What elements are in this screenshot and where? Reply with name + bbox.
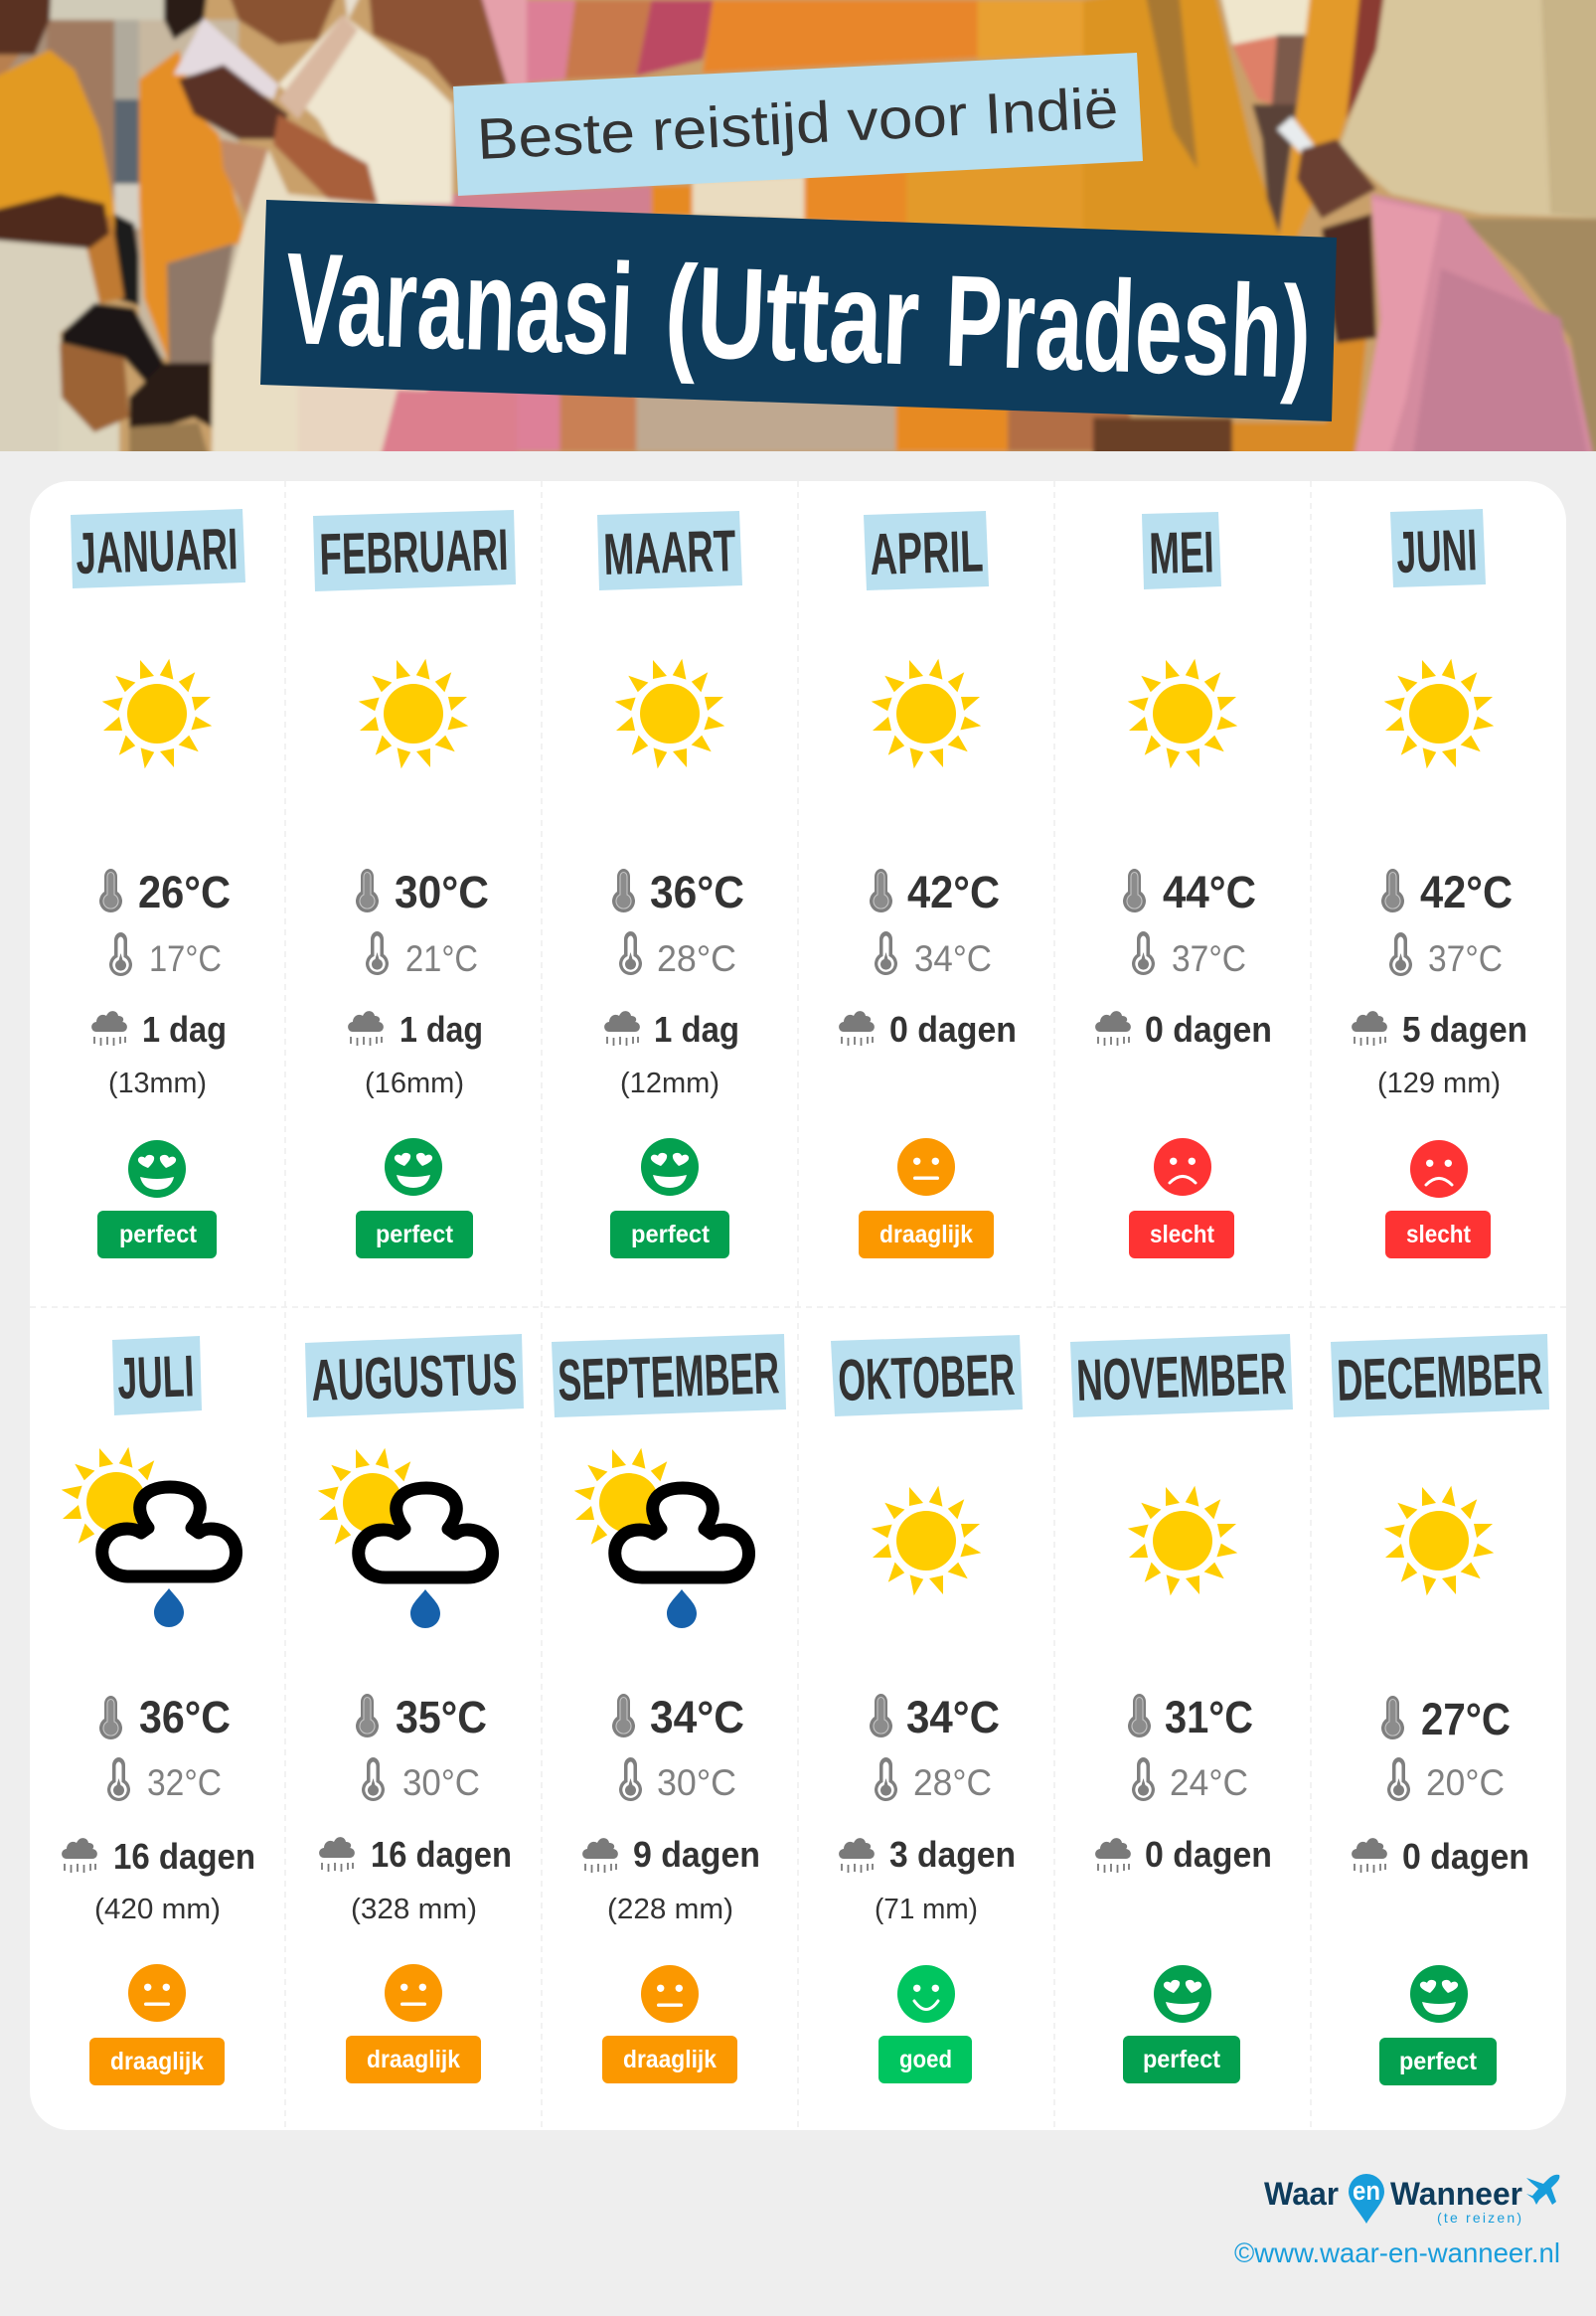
rating badge xyxy=(859,1211,994,1258)
month label: SEPTEMBER xyxy=(557,1340,780,1413)
logo: Waar en Wanneer (te reizen): (te reizen) xyxy=(1437,2210,1521,2226)
rating badge xyxy=(1123,2036,1240,2083)
rainfall: (71 mm) xyxy=(875,1894,978,1925)
month label xyxy=(597,511,742,590)
month cell: juni xyxy=(1352,509,1527,1258)
min temperature xyxy=(107,1757,222,1803)
icon: sun xyxy=(1384,659,1494,768)
rain days: 5 dagen xyxy=(1402,1009,1527,1050)
month cell: februari xyxy=(313,510,516,1258)
rating badge xyxy=(356,1211,473,1258)
max temperature: 36°C xyxy=(650,867,744,917)
rating badge: slecht xyxy=(1150,1221,1215,1248)
logo: Waar en Wanneer (te reizen): Wanneer xyxy=(1390,2176,1522,2212)
month cell: juli xyxy=(62,1336,255,2085)
rain days: 1 dag xyxy=(399,1009,483,1050)
max temperature: 30°C xyxy=(395,867,489,917)
max temperature: 31°C xyxy=(1165,1692,1253,1742)
min temperature xyxy=(875,1757,992,1803)
rating badge xyxy=(878,2036,972,2083)
min temperature: 37°C xyxy=(1428,938,1503,979)
rain days xyxy=(604,1009,739,1050)
max temperature: 44°C xyxy=(1163,867,1256,917)
rating badge: perfect xyxy=(119,1221,198,1248)
min temperature: 32°C xyxy=(147,1762,222,1803)
month label xyxy=(71,509,245,588)
month label: MAART xyxy=(602,518,736,587)
month label xyxy=(1142,512,1221,589)
icon: sun xyxy=(102,659,212,768)
month label: APRIL xyxy=(869,518,984,587)
rain days xyxy=(348,1009,483,1050)
month cell: oktober xyxy=(831,1335,1023,2083)
rain days xyxy=(1095,1834,1272,1875)
icon: sun behind rain cloud xyxy=(62,1447,237,1627)
month label: JANUARI xyxy=(75,516,239,586)
month label: AUGUSTUS xyxy=(310,1341,518,1413)
month label xyxy=(305,1334,524,1417)
min temperature: 30°C xyxy=(402,1762,480,1803)
rain days: 0 dagen xyxy=(1402,1836,1529,1877)
rainfall: (12mm) xyxy=(620,1068,719,1099)
month label: JULI xyxy=(116,1343,195,1411)
icon: sun behind rain cloud xyxy=(318,1448,493,1628)
rain days xyxy=(319,1834,512,1875)
month label xyxy=(313,510,516,591)
month label xyxy=(1070,1334,1293,1417)
rain days: 0 dagen xyxy=(1145,1009,1272,1050)
month label: MEI xyxy=(1149,519,1214,586)
month cell: april xyxy=(839,511,1017,1258)
icon: airplane xyxy=(1526,2175,1559,2205)
min temperature: 34°C xyxy=(914,938,992,979)
month label xyxy=(112,1336,202,1415)
month cell: mei xyxy=(1095,512,1272,1258)
min temperature: 20°C xyxy=(1426,1762,1505,1803)
min temperature: 28°C xyxy=(657,938,736,979)
rating badge xyxy=(97,1211,217,1258)
min temperature: 17°C xyxy=(149,938,222,979)
header photo: crowd of pilgrims in orange and pink robes xyxy=(0,0,1596,477)
icon: location pin: en xyxy=(1353,2176,1380,2206)
month cell: januari xyxy=(71,509,245,1258)
title banner: Varanasi xyxy=(283,225,636,383)
month label: OKTOBER xyxy=(837,1342,1016,1413)
rainfall: (228 mm) xyxy=(607,1894,733,1925)
subtitle banner xyxy=(453,53,1143,196)
icon: sun behind rain cloud xyxy=(574,1448,749,1628)
icon: sun xyxy=(1128,659,1237,768)
rating badge xyxy=(89,2038,225,2085)
max temperature xyxy=(870,1692,1000,1742)
rating badge xyxy=(602,2036,737,2083)
max temperature xyxy=(1123,867,1256,917)
month cell: december xyxy=(1331,1334,1549,2085)
min temperature xyxy=(366,931,478,979)
rating badge: perfect xyxy=(376,1221,454,1248)
max temperature xyxy=(99,867,231,917)
rating badge: draaglijk xyxy=(623,2046,717,2073)
rain days xyxy=(582,1834,760,1875)
rain days: 3 dagen xyxy=(889,1834,1016,1875)
rating badge xyxy=(1379,2038,1497,2085)
rain days xyxy=(1352,1009,1527,1050)
rainfall: (420 mm) xyxy=(94,1894,221,1925)
max temperature: 35°C xyxy=(396,1692,487,1742)
min temperature xyxy=(875,931,992,979)
max temperature: 34°C xyxy=(650,1692,744,1742)
title banner: (Uttar xyxy=(663,238,922,393)
max temperature xyxy=(356,1692,487,1742)
rating face xyxy=(385,1964,442,2022)
min temperature: 24°C xyxy=(1170,1762,1248,1803)
min temperature xyxy=(619,931,736,979)
rating face xyxy=(897,1965,955,2023)
rating badge: draaglijk xyxy=(367,2046,460,2073)
rating badge: goed xyxy=(899,2046,952,2073)
rating face xyxy=(128,1964,186,2022)
rating face xyxy=(1410,1140,1468,1198)
max temperature: 42°C xyxy=(1420,867,1513,917)
max temperature xyxy=(1381,1694,1511,1744)
rating badge: perfect xyxy=(631,1221,711,1248)
max temperature: 26°C xyxy=(138,867,231,917)
month cell: maart xyxy=(597,511,744,1258)
icon: location pin xyxy=(1349,2174,1384,2224)
min temperature xyxy=(1389,932,1503,979)
icon: sun xyxy=(872,1486,981,1595)
rating badge: perfect xyxy=(1399,2048,1478,2075)
rain days: 9 dagen xyxy=(633,1834,760,1875)
rain days xyxy=(839,1834,1016,1875)
min temperature: 30°C xyxy=(657,1762,736,1803)
month label: FEBRUARI xyxy=(319,517,509,587)
month cell: november xyxy=(1070,1334,1293,2083)
month label: JUNI xyxy=(1395,517,1478,585)
min temperature xyxy=(619,1757,736,1803)
min temperature xyxy=(109,932,222,979)
rating face xyxy=(897,1138,955,1196)
rain days: 0 dagen xyxy=(1145,1834,1272,1875)
rain days: 16 dagen xyxy=(113,1836,255,1877)
rain days: 0 dagen xyxy=(889,1009,1017,1050)
rain days xyxy=(91,1009,227,1050)
max temperature xyxy=(1128,1692,1253,1742)
rating face xyxy=(1154,1965,1211,2023)
rating badge xyxy=(610,1211,729,1258)
month cell: augustus xyxy=(305,1334,524,2083)
month label xyxy=(552,1334,786,1417)
icon: sun xyxy=(1384,1486,1494,1595)
panel: monthly climate card xyxy=(30,481,1566,2130)
rain days: 1 dag xyxy=(142,1009,227,1050)
rating badge xyxy=(1129,1211,1234,1258)
title banner: Pradesh) xyxy=(943,248,1313,406)
rating face xyxy=(128,1140,186,1198)
rainfall: (13mm) xyxy=(108,1068,207,1099)
rainfall: (129 mm) xyxy=(1377,1068,1501,1099)
rating badge: draaglijk xyxy=(110,2048,204,2075)
rainfall: (328 mm) xyxy=(351,1894,477,1925)
rain days xyxy=(62,1836,255,1877)
icon: sun xyxy=(359,659,468,768)
rating face xyxy=(1154,1138,1211,1196)
max temperature xyxy=(870,867,1000,917)
max temperature xyxy=(99,1692,231,1742)
month label xyxy=(864,511,989,590)
rating face xyxy=(385,1138,442,1196)
rating badge: slecht xyxy=(1406,1221,1472,1248)
min temperature xyxy=(362,1757,480,1803)
max temperature: 42°C xyxy=(907,867,1000,917)
max temperature xyxy=(612,1692,744,1742)
icon: sun xyxy=(1128,1486,1237,1595)
month label xyxy=(831,1335,1023,1416)
source url: ©www.waar-en-wanneer.nl xyxy=(1234,2237,1560,2268)
rain days xyxy=(1352,1836,1529,1877)
icon: sun xyxy=(872,659,981,768)
max temperature: 27°C xyxy=(1421,1694,1511,1744)
rating face xyxy=(641,1965,699,2023)
rating badge: perfect xyxy=(1143,2046,1221,2073)
rating badge: draaglijk xyxy=(879,1221,973,1248)
rain days: 16 dagen xyxy=(371,1834,512,1875)
min temperature xyxy=(1132,1757,1248,1803)
max temperature xyxy=(1381,867,1513,917)
logo: Waar en Wanneer (te reizen): Waar xyxy=(1264,2176,1339,2212)
min temperature xyxy=(1387,1757,1505,1803)
rainfall: (16mm) xyxy=(365,1068,464,1099)
rating face xyxy=(1410,1965,1468,2023)
min temperature: 37°C xyxy=(1172,938,1246,979)
max temperature xyxy=(612,867,744,917)
subtitle banner: Beste reistijd voor Indië xyxy=(475,76,1120,172)
min temperature xyxy=(1132,931,1246,979)
rain days xyxy=(839,1009,1017,1050)
month label xyxy=(1390,509,1486,587)
min temperature: 21°C xyxy=(405,938,478,979)
logo: Waar en Wanneer (te reizen) xyxy=(1264,2174,1559,2226)
min temperature: 28°C xyxy=(913,1762,992,1803)
max temperature xyxy=(356,867,489,917)
rating face xyxy=(641,1138,699,1196)
month label: NOVEMBER xyxy=(1075,1341,1287,1413)
rating badge xyxy=(1385,1211,1491,1258)
rain days xyxy=(1095,1009,1272,1050)
month cell: september xyxy=(552,1334,786,2083)
max temperature: 34°C xyxy=(906,1692,1000,1742)
max temperature: 36°C xyxy=(139,1692,231,1742)
rating badge xyxy=(346,2036,481,2083)
rain days: 1 dag xyxy=(654,1009,739,1050)
title banner xyxy=(260,200,1337,421)
icon: sun xyxy=(615,659,724,768)
